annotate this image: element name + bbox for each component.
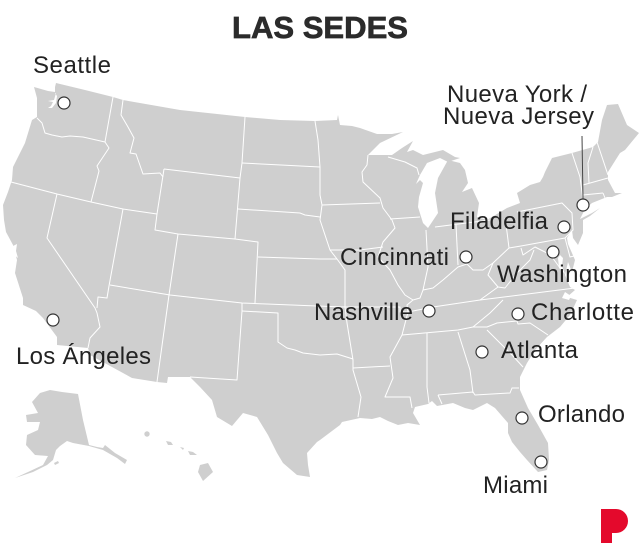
label: Los Ángeles: Los Ángeles [16, 343, 151, 370]
map: contiguous states landmass [3, 83, 639, 477]
coastal inlets [13, 93, 571, 300]
marker: Washington [547, 246, 559, 258]
label: Washington: Washington [497, 261, 627, 288]
label: Nueva Jersey: Nueva Jersey [443, 103, 594, 130]
marker: Charlotte [512, 308, 524, 320]
state borders [11, 97, 608, 417]
marker: Nashville [423, 305, 435, 317]
label: Orlando: Orlando [538, 401, 625, 428]
title: LAS SEDES [232, 10, 408, 45]
marker: Filadelfia [558, 221, 570, 233]
marker: Los Ángeles [47, 314, 59, 326]
map: United States [3, 83, 639, 481]
logo: red P [601, 509, 628, 543]
marker: Miami [535, 456, 547, 468]
marker: Seattle [58, 97, 70, 109]
label: Miami: Miami [483, 472, 548, 499]
label: Charlotte: Charlotte [531, 299, 634, 326]
label: Nashville: Nashville [314, 299, 413, 326]
label: Nueva York: Nueva York / [447, 81, 587, 108]
marker: Atlanta [476, 346, 488, 358]
marker: Nueva York / Nueva Jersey [577, 199, 589, 211]
Alaska [15, 390, 127, 478]
Hawaii [54, 431, 213, 481]
label: Seattle: Seattle [33, 52, 111, 79]
label: Filadelfia: Filadelfia [450, 208, 549, 235]
label: Atlanta: Atlanta [501, 337, 579, 364]
leader line: Nueva York [582, 136, 583, 200]
label: Cincinnati: Cincinnati [340, 244, 449, 271]
marker: Cincinnati [460, 251, 472, 263]
marker: Orlando [516, 412, 528, 424]
